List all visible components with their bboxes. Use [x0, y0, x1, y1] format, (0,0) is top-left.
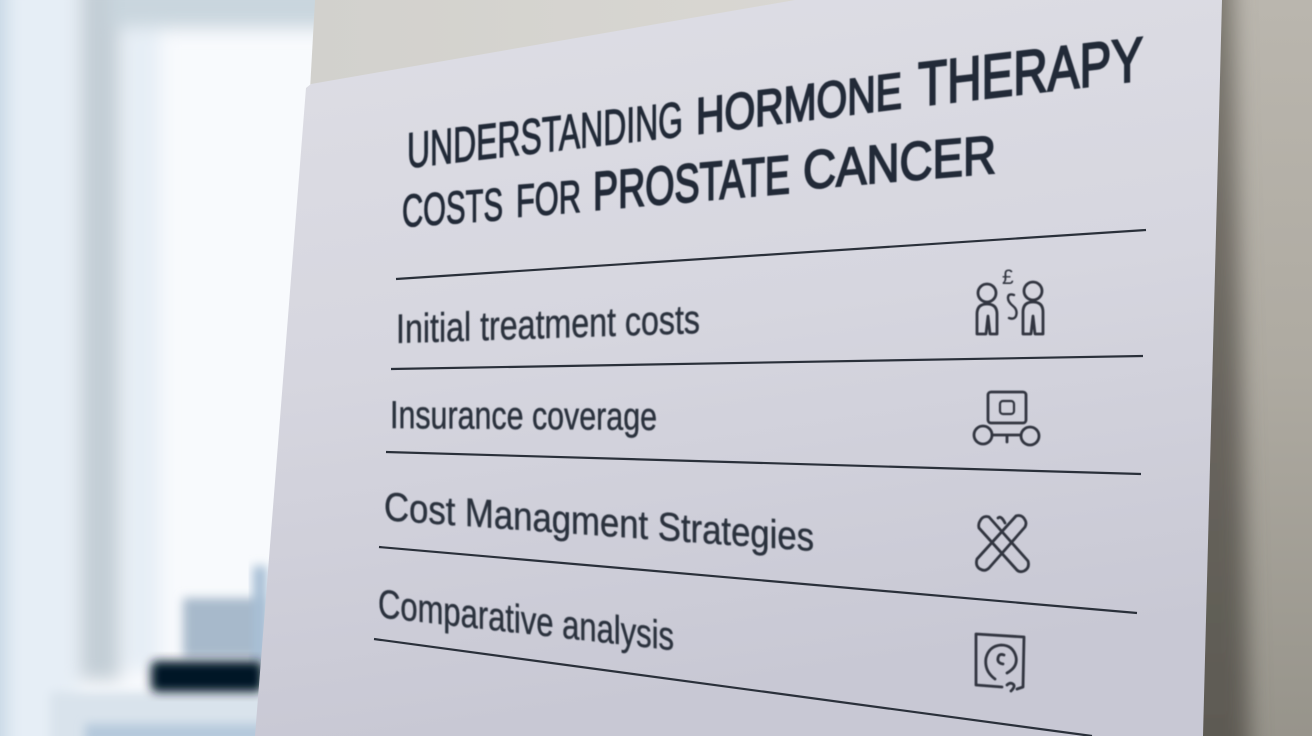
row: initial treatment costs: Initial treatment costs	[396, 296, 700, 352]
divider under title	[396, 230, 1146, 279]
row: cost management strategies: Cost Managment Strategies	[384, 485, 814, 560]
title: PROSTATE	[593, 145, 790, 222]
divider	[374, 639, 1092, 736]
divider	[391, 356, 1143, 369]
row: comparative analysis	[378, 581, 1024, 691]
title: COSTS	[402, 178, 503, 237]
background cup and bowl on shelf	[50, 566, 345, 736]
divider	[386, 452, 1141, 474]
icon: two people with currency	[977, 266, 1043, 334]
icon: framed copyright symbol	[976, 634, 1024, 691]
title: UNDERSTANDING	[407, 91, 683, 179]
divider	[379, 547, 1137, 613]
row: comparative analysis: Comparative analysis	[378, 581, 674, 659]
wall behind the poster	[310, 0, 1312, 736]
icon: two people with currency: £	[1002, 266, 1014, 289]
icon: crossed bars	[976, 516, 1028, 572]
title: FOR	[516, 170, 581, 227]
row: insurance coverage	[390, 392, 1039, 445]
title	[402, 25, 1143, 237]
poster board	[255, 0, 1222, 736]
blurred room background	[0, 0, 340, 736]
title: CANCER	[803, 125, 996, 201]
title: HORMONE	[696, 62, 902, 145]
icon: device with connected nodes	[974, 392, 1039, 445]
row: insurance coverage: Insurance coverage	[390, 394, 657, 439]
title: THERAPY	[918, 25, 1143, 120]
row: initial treatment costs	[396, 266, 1043, 352]
